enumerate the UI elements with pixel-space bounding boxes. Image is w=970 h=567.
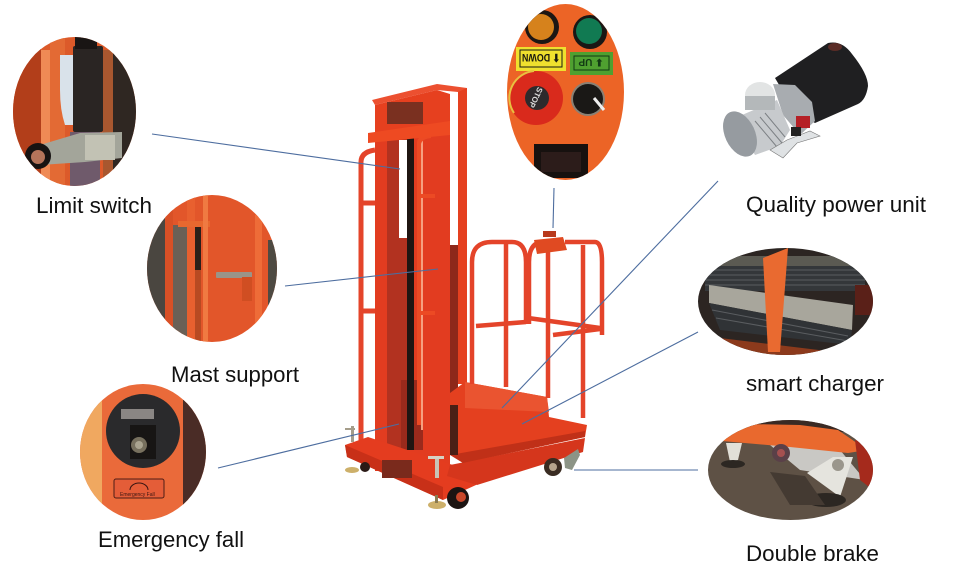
label: mast support: Mast support [171,362,300,387]
line: double brake [574,469,698,471]
mounting bracket [770,131,820,158]
callout: control panel photo: STOP [527,86,544,110]
label: quality power unit: Quality power unit [746,192,927,217]
motor body [735,100,790,155]
platform [450,382,587,463]
callout: control panel photo: ⬇ UP [578,56,604,67]
label: smart charger: smart charger [746,371,884,396]
line: mast support [285,269,438,286]
line: power unit [502,181,718,408]
line: control panel [553,188,554,228]
line: emergency fall [218,424,399,468]
callout: smart charger photo [698,248,874,355]
order picker lift machine [345,84,602,509]
line: limit switch [152,134,400,169]
rear rail [458,88,467,384]
pump manifold [773,84,815,135]
callout: control panel photo [507,4,624,180]
terminal box [745,82,775,108]
leader lines [152,134,718,470]
callout: mast support photo [147,195,277,342]
line: smart charger [522,332,698,424]
label: emergency fall: Emergency fall [98,527,244,552]
mast-side wheel [345,426,469,509]
label: limit switch: Limit switch [36,193,152,218]
castor wheel and brake [544,449,580,476]
motor flange [716,106,764,162]
control box [534,231,567,254]
left handrail [361,150,376,446]
callout: emergency fall photo: Emergency Fall [120,492,155,498]
base chassis [345,437,585,500]
mast body [375,134,458,471]
guard rails [472,241,602,418]
callout: emergency fall photo [80,384,206,520]
red valve [796,116,810,128]
callout: limit switch photo [13,37,136,187]
callout: power unit illustration [716,42,868,162]
label: double brake: Double brake [746,541,879,566]
callout: control panel photo: ⬆ DOWN [522,51,560,63]
mast head [368,84,467,143]
callout: double brake photo [708,420,873,520]
oil tank [775,42,868,123]
